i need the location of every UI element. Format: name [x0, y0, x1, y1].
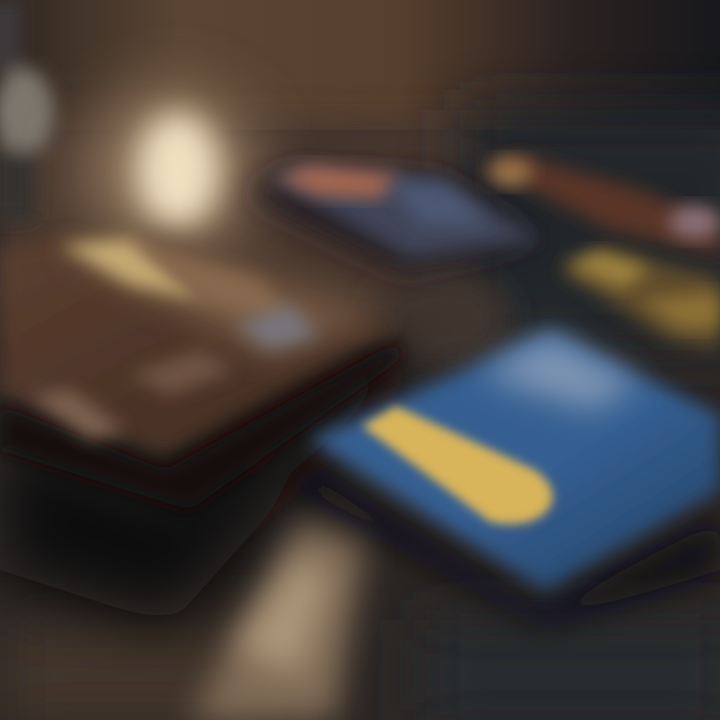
glass object at left edge — [0, 0, 54, 220]
light streak on table — [190, 520, 365, 720]
card: gold, right — [560, 248, 720, 350]
card: large blue with yellow stripe — [300, 330, 720, 625]
card: red and orange, back right — [485, 155, 720, 255]
card: orange and blue, back centre — [245, 165, 540, 272]
wallet: shadow — [0, 345, 405, 625]
wallet: leather body — [0, 235, 400, 510]
light glow above wallet — [80, 85, 260, 255]
